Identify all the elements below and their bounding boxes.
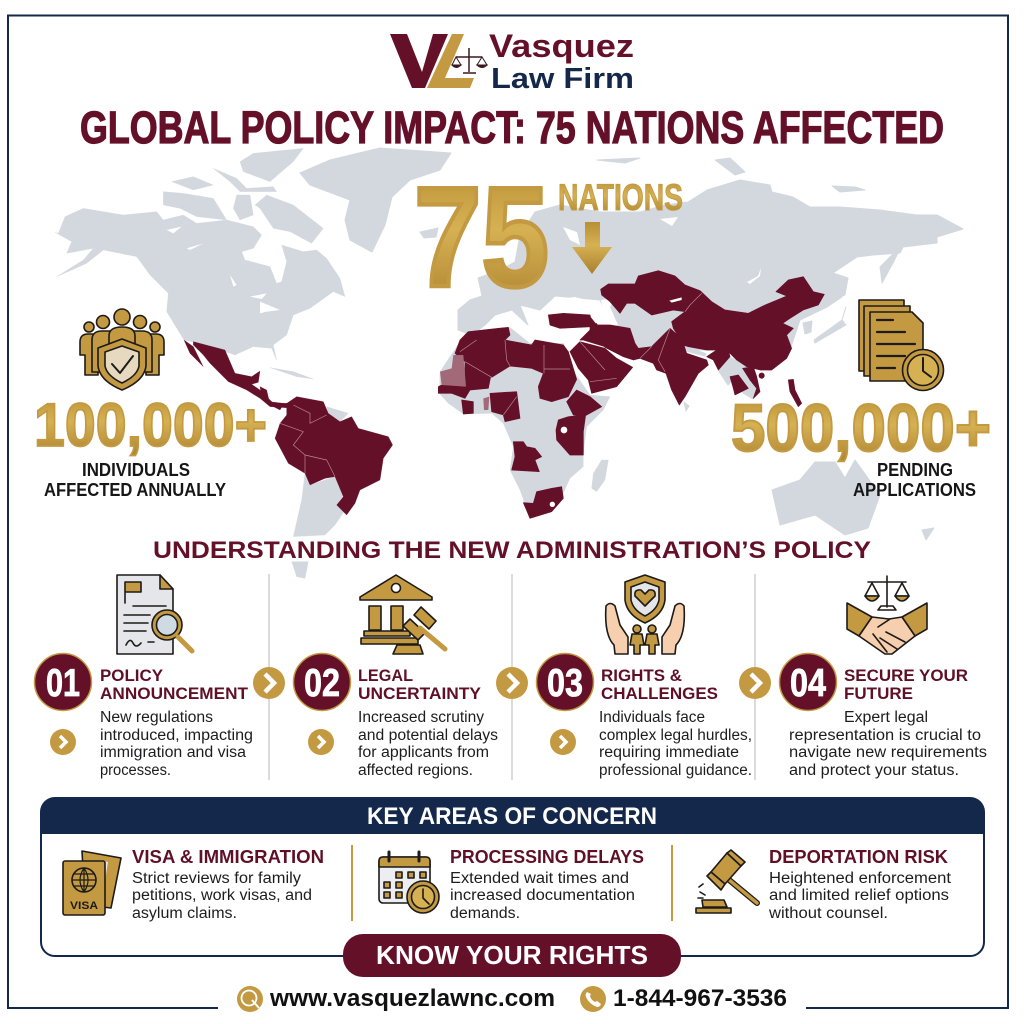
number badge 02: 02	[304, 662, 340, 705]
stat: individuals affected	[34, 309, 267, 500]
logo mark: V	[390, 34, 448, 88]
item body: Strict reviews for family	[132, 870, 301, 887]
step body: representation is crucial to	[789, 727, 981, 744]
Ethiopia	[567, 390, 602, 416]
small chevron	[50, 729, 76, 755]
step body: Increased scrutiny	[358, 709, 484, 726]
icon: scales and handshake	[847, 576, 927, 654]
number badge 03: 03	[547, 662, 583, 705]
caption: individuals: INDIVIDUALS	[82, 460, 190, 480]
item body: asylum claims.	[132, 905, 237, 922]
icon: shield, hands, family	[606, 575, 684, 654]
borders	[460, 340, 617, 415]
Kamchatka	[880, 245, 902, 283]
Greenland	[300, 148, 451, 252]
item body: without counsel.	[768, 905, 888, 922]
logo scales	[452, 48, 487, 73]
Central Asia and China	[601, 271, 824, 370]
icon: website	[237, 986, 263, 1012]
map: affected nations, Americas	[184, 340, 393, 515]
number badge 01	[34, 654, 92, 710]
step body: requiring immediate	[599, 744, 739, 761]
phone number: 1-844-967-3536	[613, 985, 787, 1012]
step heading: POLICY	[100, 666, 164, 685]
icon: phone	[580, 986, 606, 1012]
Hainan	[759, 373, 764, 378]
step body	[358, 709, 498, 779]
item body: petitions, work visas, and	[132, 887, 312, 904]
item body	[132, 870, 312, 922]
big number 75: 75	[414, 158, 549, 317]
small chevron	[550, 729, 576, 755]
item body	[450, 870, 635, 922]
step body	[789, 709, 987, 779]
Sri Lanka	[684, 402, 689, 411]
Philippines	[788, 379, 802, 407]
number badge 03	[536, 654, 594, 710]
footer contact	[237, 985, 787, 1012]
step 01	[34, 575, 253, 779]
small chevron	[308, 729, 334, 755]
step heading line 2: FUTURE	[844, 684, 913, 703]
item body: demands.	[450, 905, 520, 922]
step body: and protect your status.	[789, 762, 959, 779]
icon: passport: VISA	[70, 900, 98, 912]
step body: introduced, impacting	[100, 727, 253, 744]
stat: pending applications	[731, 300, 991, 500]
arrow: step 2 to 3	[496, 667, 528, 699]
Iceland	[420, 228, 438, 238]
Nepal gap	[685, 346, 707, 357]
step heading line 2: UNCERTAINTY	[358, 684, 482, 703]
value: 500,000+: 500,000+	[731, 391, 991, 466]
Aral Sea	[669, 297, 682, 303]
Turkey	[548, 313, 593, 328]
item body: increased documentation	[450, 887, 635, 904]
South Africa	[523, 487, 563, 518]
Arabian Peninsula	[570, 342, 633, 393]
icon: calendar with clock	[379, 852, 439, 913]
value: 100,000+: 100,000+	[34, 391, 267, 459]
number badge 01: 01	[46, 662, 80, 705]
icon: document with magnifier	[117, 575, 192, 654]
icon: gavel	[696, 850, 757, 913]
step body: New regulations	[100, 709, 213, 726]
North America	[55, 148, 345, 379]
item heading: PROCESSING DELAYS	[450, 847, 644, 867]
item heading: DEPORTATION RISK	[769, 847, 948, 867]
Mali and Senegal	[438, 362, 491, 398]
item body	[768, 870, 952, 922]
item body: and limited relief options	[769, 887, 949, 904]
panel outline	[41, 798, 984, 956]
arrow: step 1 to 2	[253, 667, 285, 699]
step body: processes.	[100, 762, 171, 779]
logo name: Vasquez: Vasquez	[489, 28, 634, 64]
icon: passport	[63, 851, 121, 915]
map: affected nations, Africa and Middle East	[438, 313, 633, 518]
arrow: down to map	[572, 222, 612, 274]
Guinea	[462, 400, 473, 414]
step heading: SECURE YOUR	[844, 666, 968, 685]
call to action pill	[343, 934, 681, 977]
caption: applications: APPLICATIONS	[853, 480, 976, 500]
Vietnam	[743, 367, 760, 398]
call to action pill: KNOW YOUR RIGHTS	[376, 940, 648, 970]
South America	[292, 407, 348, 578]
panel: key areas of concern	[41, 798, 984, 956]
logo	[390, 28, 634, 95]
Japan and Sakhalin	[814, 277, 848, 343]
step body: professional guidance.	[599, 762, 752, 779]
gold dividers	[352, 845, 672, 921]
step body: and potential delays	[358, 727, 498, 744]
panel heading: KEY AREAS OF CONCERN	[367, 803, 657, 830]
label: NATIONS: NATIONS	[558, 177, 683, 218]
website url: www.vasquezlawnc.com	[269, 985, 555, 1012]
Nigeria and Cameroon	[490, 392, 520, 422]
number badge 04	[780, 654, 836, 710]
New Zealand	[922, 528, 934, 540]
dividers	[269, 574, 755, 780]
arrow: step 3 to 4	[739, 667, 771, 699]
step body: for applicants from	[358, 744, 489, 761]
item body: Heightened enforcement	[769, 870, 952, 887]
icon: courthouse and gavel	[360, 575, 445, 654]
section heading: UNDERSTANDING THE NEW ADMINISTRATION’S POLICY	[153, 537, 871, 564]
world map	[55, 148, 963, 578]
step 04	[780, 576, 987, 779]
Africa	[439, 327, 610, 518]
step body: immigration and visa	[100, 744, 246, 761]
step body: complex legal hurdles,	[599, 727, 752, 744]
step heading line 2: CHALLENGES	[601, 684, 718, 703]
lakes	[561, 427, 567, 433]
Iran, Pakistan, India	[590, 317, 708, 405]
map: affected nations, Asia	[590, 271, 824, 407]
step body	[599, 709, 752, 779]
step body	[100, 709, 253, 779]
Eurasia	[458, 180, 963, 350]
logo name: Law Firm: Law Firm	[491, 63, 634, 95]
step body: Expert legal	[844, 709, 928, 726]
logo mark: L	[427, 34, 474, 88]
map: grey landmasses	[55, 148, 963, 578]
Australia	[772, 460, 880, 535]
Southeast Asia	[718, 357, 760, 399]
Black Sea, Caspian, Baltic, Baikal	[553, 217, 761, 327]
step body: affected regions.	[358, 762, 473, 779]
caption: affected annually: AFFECTED ANNUALLY	[44, 480, 226, 500]
number badge 04: 04	[790, 662, 826, 705]
North Africa	[455, 327, 577, 402]
number badge 02	[294, 654, 350, 710]
panel header bar	[41, 798, 984, 834]
caption: pending: PENDING	[877, 460, 953, 480]
step heading line 2: ANNOUNCEMENT	[100, 684, 249, 703]
item heading: VISA & IMMIGRATION	[132, 847, 324, 867]
Arctic islands	[597, 158, 865, 192]
step heading: LEGAL	[358, 666, 413, 685]
item body: Extended wait times and	[450, 870, 629, 887]
Korea	[803, 321, 812, 334]
step body: navigate new requirements	[789, 744, 987, 761]
Iraq and Syria	[580, 323, 605, 347]
step heading: RIGHTS &	[601, 666, 682, 685]
Bangladesh and Myanmar border	[707, 350, 730, 370]
step 03	[536, 575, 752, 779]
East Africa	[556, 415, 586, 455]
step body: Individuals face	[599, 709, 705, 726]
light countries	[440, 355, 466, 387]
Thailand	[730, 375, 748, 395]
icon: documents and clock	[859, 300, 944, 390]
icon: people with shield	[80, 309, 164, 390]
borders	[640, 293, 702, 372]
step 02	[294, 575, 498, 779]
Angola	[512, 442, 542, 472]
